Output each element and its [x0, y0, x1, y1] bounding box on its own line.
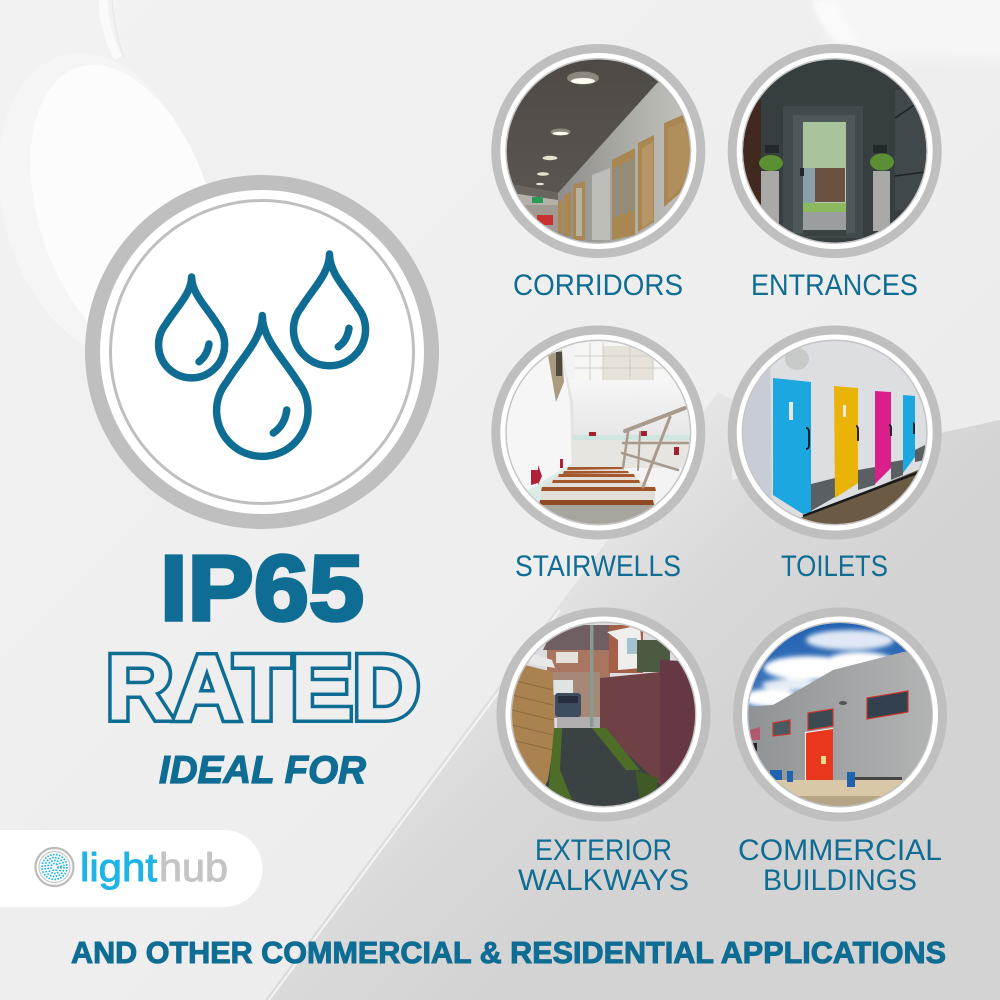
label: stairwells: STAIRWELLS [515, 550, 681, 583]
photo: commercial building [748, 623, 932, 806]
label: entrances: ENTRANCES [751, 269, 918, 302]
ring [728, 44, 942, 258]
label: commercial buildings [738, 834, 942, 897]
headline: RATED outline: RATED [106, 637, 420, 739]
panel: entrances [728, 44, 942, 302]
icon: water drops [159, 254, 366, 456]
ring [496, 608, 710, 822]
ring [491, 326, 705, 540]
label: exterior walkways [518, 834, 689, 897]
photo: walkway [512, 623, 695, 806]
label: exterior walkways: WALKWAYS [518, 864, 689, 897]
headline: IP65: IP65 [160, 536, 364, 640]
logo: lighthub: hub [159, 846, 228, 890]
photo: entrance door [743, 60, 926, 242]
ring [491, 44, 705, 258]
label: toilets: TOILETS [781, 550, 888, 583]
ring [728, 326, 942, 540]
logo: lighthub [0, 830, 262, 907]
subheading: ideal for: IDEAL FOR [159, 749, 366, 792]
label: commercial buildings: BUILDINGS [763, 864, 917, 897]
panel: commercial buildings [733, 608, 947, 897]
panel: toilets [728, 326, 942, 583]
icon: lighthub ring [36, 848, 74, 886]
panel: stairwells [491, 326, 705, 583]
product photo: round light fixture [0, 0, 254, 385]
photo: coloured toilet doors [743, 341, 926, 524]
label: corridors: CORRIDORS [513, 269, 683, 302]
label: exterior walkways: EXTERIOR [535, 834, 672, 867]
logo wordmark: light [80, 846, 157, 890]
main badge: water drops [85, 175, 439, 529]
panel: exterior walkways [496, 608, 710, 897]
photo: stairwell [506, 341, 690, 524]
label: commercial buildings: COMMERCIAL [738, 834, 942, 867]
panel: corridors [491, 44, 720, 302]
ring [733, 608, 947, 822]
headline: RATED outline: RATED [106, 637, 420, 739]
photo: corridor [506, 60, 690, 242]
footer text: AND OTHER COMMERCIAL & RESIDENTIAL APPLICATIONS [71, 935, 946, 970]
